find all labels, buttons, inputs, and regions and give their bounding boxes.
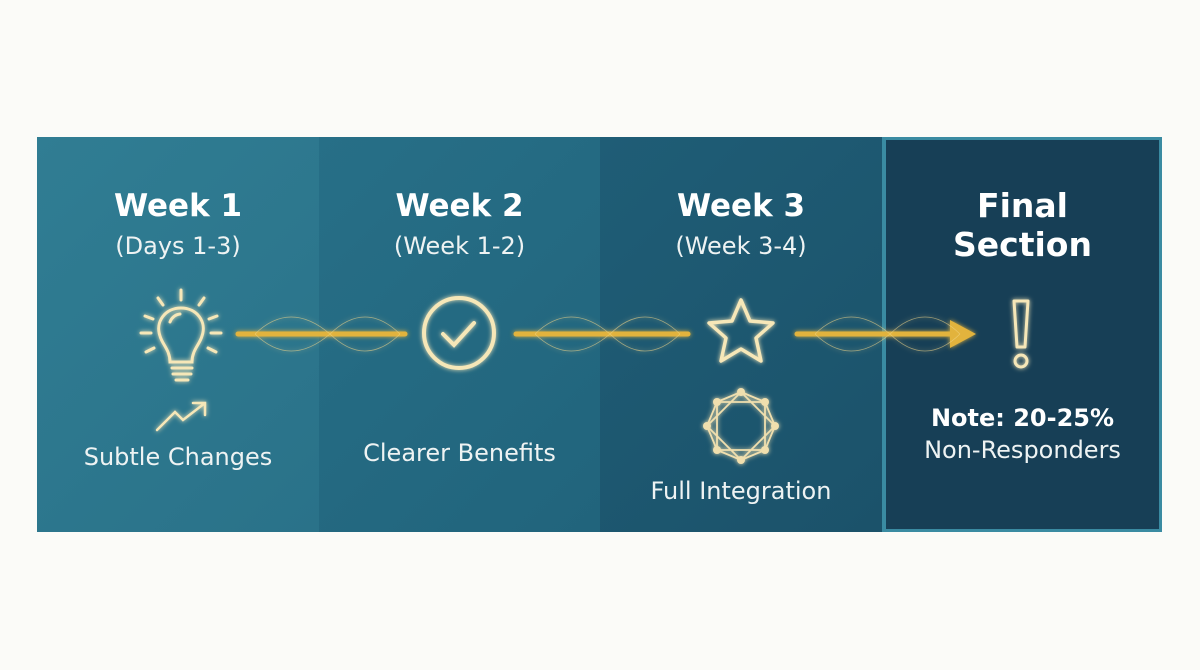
icon: trend arrow	[157, 403, 205, 430]
label: full integration: Full Integration	[651, 477, 831, 505]
heading: final section: Section	[953, 225, 1092, 264]
panel: week 2	[319, 137, 600, 532]
heading: week 2: Week 2	[395, 188, 524, 224]
connector 3 arrow	[797, 317, 976, 351]
heading: final section: Final	[977, 186, 1068, 225]
subheading: days 1-3: (Days 1-3)	[115, 232, 241, 260]
banner	[37, 137, 1162, 532]
heading: week 3: Week 3	[677, 188, 805, 224]
heading: week 1: Week 1	[114, 188, 242, 224]
panel: week 1	[37, 137, 319, 532]
note: non-responders: Note: 20-25%	[931, 404, 1114, 432]
icon: lightbulb	[141, 290, 221, 380]
connector 2	[516, 317, 688, 351]
icon: network	[703, 388, 779, 464]
label: subtle changes: Subtle Changes	[84, 443, 272, 471]
icon: exclamation	[1014, 301, 1028, 367]
note: non-responders: Non-Responders	[924, 436, 1121, 464]
label: clearer benefits: Clearer Benefits	[363, 439, 556, 467]
icon: check circle	[424, 298, 494, 368]
panel: final section	[882, 137, 1162, 532]
subheading: week 3-4: (Week 3-4)	[675, 232, 807, 260]
heading: final section	[953, 186, 1092, 264]
connector 1	[238, 317, 405, 351]
subheading: week 1-2: (Week 1-2)	[394, 232, 525, 260]
panel: week 3	[600, 137, 882, 532]
note: non-responders	[924, 404, 1121, 464]
icon: star	[709, 300, 773, 361]
